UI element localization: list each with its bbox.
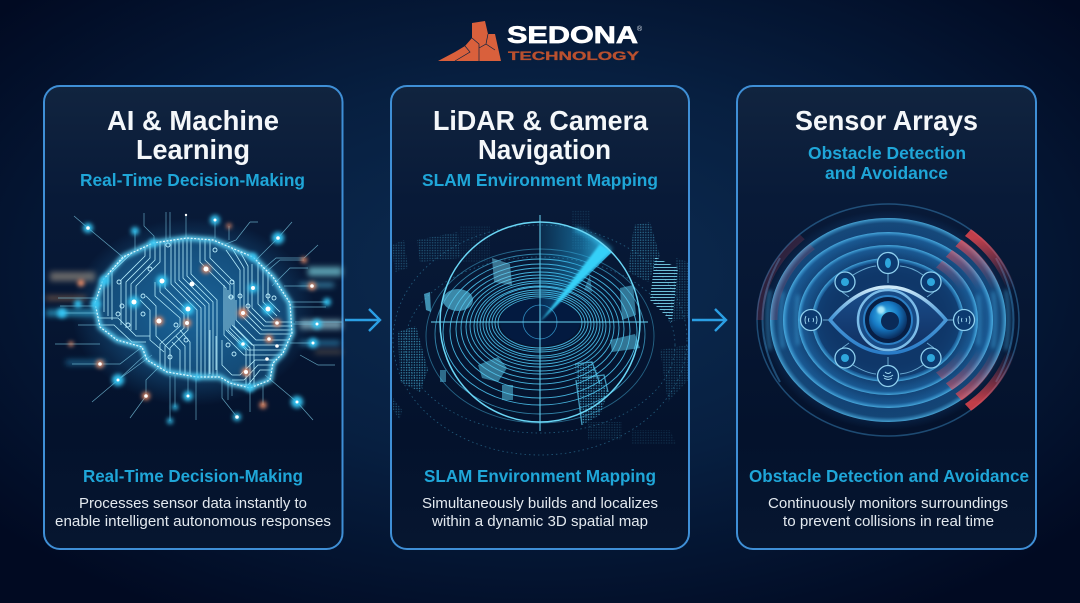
- outer dotted scan arcs: [393, 225, 687, 455]
- panel frame: [44, 86, 342, 549]
- heading: [433, 105, 648, 165]
- brain inner traces: [92, 238, 296, 392]
- concentric scan rings: [426, 249, 654, 423]
- illustration: LiDAR radar map: [392, 210, 688, 455]
- panel frame: [737, 86, 1036, 549]
- description: [768, 495, 1008, 530]
- brain outline glow: [95, 238, 292, 388]
- panel frame: [391, 86, 689, 549]
- pulse rings: [770, 218, 1006, 422]
- description: Simultaneously builds and localizes: [422, 495, 658, 512]
- icon: red mountain: [438, 21, 501, 61]
- subheading: Real-Time Decision-Making: [80, 170, 305, 190]
- brain outline: [95, 238, 292, 388]
- wordmark: SEDONA: SEDONA: [507, 22, 638, 49]
- point cloud objects: [392, 210, 688, 444]
- logo: Sedona Technology: [438, 21, 643, 63]
- iris rings: [858, 290, 918, 350]
- ring base glow: [760, 210, 1016, 430]
- description: within a dynamic 3D spatial map: [431, 513, 648, 530]
- faint red arcs: [756, 234, 815, 320]
- radar dark core: [500, 298, 580, 346]
- lens glint: [877, 306, 885, 314]
- subheading: SLAM Environment Mapping: [422, 170, 658, 190]
- sensor nodes: [800, 252, 974, 386]
- sweep outer glow: [575, 229, 611, 251]
- illustration: sensor eye with rings: [757, 204, 1019, 436]
- description: [55, 495, 331, 530]
- lower heading: Real-Time Decision-Making: [83, 466, 303, 486]
- description: to prevent collisions in real time: [783, 513, 994, 530]
- registered mark: ®: [637, 25, 643, 33]
- heading: Learning: [136, 134, 250, 165]
- side ring highlights: [768, 290, 1008, 350]
- sensor connector arcs: [823, 266, 953, 374]
- brain terminal rings: [116, 243, 276, 359]
- faint outer rings: [757, 204, 1019, 436]
- brain halo: [71, 218, 315, 406]
- description: enable intelligent autonomous responses: [55, 513, 331, 530]
- radar crosshair: [431, 215, 648, 431]
- iris: [869, 301, 907, 339]
- panel: sensor arrays: [737, 86, 1036, 549]
- red warning arcs: [936, 229, 1015, 411]
- heading: Navigation: [478, 134, 611, 165]
- radar outer circle: [440, 222, 640, 422]
- lower heading: Obstacle Detection and Avoidance: [749, 466, 1029, 486]
- radar inner circle: [523, 305, 557, 339]
- subheading: Obstacle Detection: [808, 143, 966, 163]
- side light streaks: [46, 267, 342, 365]
- dark centre behind eye: [816, 262, 960, 378]
- blue node glows: [57, 215, 331, 424]
- arrow: AI to LiDAR: [345, 309, 380, 331]
- node cores: [86, 214, 318, 419]
- subheading: and Avoidance: [825, 163, 948, 183]
- eye shape: [830, 287, 946, 353]
- subheading: [808, 143, 966, 183]
- heading: LiDAR & Camera: [433, 105, 648, 136]
- heading: Sensor Arrays: [795, 105, 978, 136]
- arrow: LiDAR to sensors: [692, 309, 726, 331]
- description: Processes sensor data instantly to: [79, 495, 307, 512]
- lower heading: SLAM Environment Mapping: [424, 466, 656, 486]
- sweep leading edge: [540, 244, 611, 322]
- radar sweep wedge: [540, 222, 612, 322]
- pupil: [881, 312, 899, 330]
- heading: AI & Machine: [107, 105, 279, 136]
- description: Continuously monitors surroundings: [768, 495, 1008, 512]
- panel: LiDAR and camera navigation: [391, 86, 689, 549]
- outer circuit traces: [55, 212, 342, 421]
- car outlines: [575, 362, 608, 425]
- brain inner fill: [95, 238, 292, 388]
- illustration: circuit brain: [46, 212, 342, 424]
- panel: AI and machine learning: [44, 86, 342, 549]
- wordmark: TECHNOLOGY: TECHNOLOGY: [508, 51, 640, 63]
- heading: [107, 105, 279, 165]
- camera lens bezel: [864, 296, 912, 344]
- warm node glows: [68, 224, 316, 408]
- description: [422, 495, 658, 530]
